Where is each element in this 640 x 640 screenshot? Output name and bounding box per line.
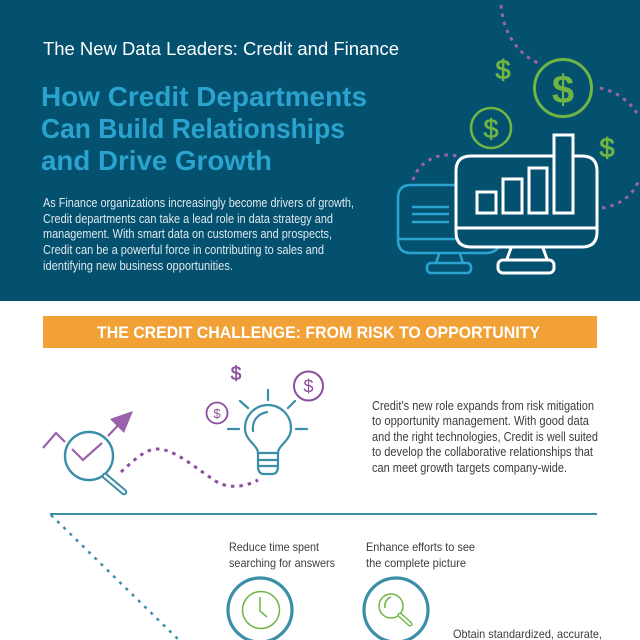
benefit: complete picture [364,540,475,640]
main heading: Can Build Relationships [41,113,345,144]
icon: large dollar coin: $ [552,68,574,112]
icon: purple dollar symbols: $ [213,406,221,421]
icon: large white monitor with bars [456,135,597,273]
intro paragraph: Credit departments can take a lead role in data strategy and [43,212,333,226]
text: credit's new role: Credit’s new role expands from risk mitigation [372,398,594,413]
benefit: complete picture: Enhance efforts to see [366,540,475,554]
subtitle: The New Data Leaders: Credit and Finance [43,39,399,59]
icon: dollar sign right: $ [599,133,615,163]
text: credit's new role: to opportunity management. With good data [372,413,590,428]
intro paragraph: As Finance organizations increasingly become drivers of growth, [43,196,354,210]
main heading [41,81,367,176]
intro paragraph: management. With smart data on customers and prospects, [43,227,332,241]
icon: small blue monitor [398,185,498,273]
panel: header [0,0,640,301]
icon: clock [228,578,292,640]
main heading: How Credit Departments [41,81,367,112]
timeline rule and dashed diagonal [50,514,597,640]
main heading: and Drive Growth [41,145,272,176]
text: credit's new role [372,398,598,475]
text: credit's new role: can meet growth targets company-wide. [372,460,567,475]
intro paragraph: identifying new business opportunities. [43,259,233,273]
icon: purple dollar symbols: $ [231,364,242,385]
benefit: complete picture: the complete picture [366,556,466,570]
icon: search [364,578,428,640]
section banner [43,316,597,348]
icon: large dollar coin [534,60,592,116]
icon: light bulb [228,390,307,474]
icon: dollar sign left: $ [495,55,511,85]
text: credit's new role: and the right technologies, Credit is well suited [372,429,598,444]
intro paragraph [43,196,354,273]
icon: magnifier with check and arrow [43,411,133,492]
benefit: reduce time [228,540,335,640]
icon: small dollar coin: $ [483,114,499,144]
icon: small dollar coin [471,108,511,148]
dotted connectors [413,5,638,208]
icon: purple dollar symbols [206,364,323,424]
section banner: THE CREDIT CHALLENGE: FROM RISK TO OPPORTUNITY [97,324,540,342]
icon: purple dollar symbols: $ [303,376,314,396]
dotted path to bulb [121,449,258,486]
text: credit's new role: to develop the collaborative relationships that [372,444,593,459]
benefit: reduce time: searching for answers [229,556,335,570]
benefit: reduce time: Reduce time spent [229,540,320,554]
intro paragraph: Credit can be a powerful force in contributing to sales and [43,243,324,257]
